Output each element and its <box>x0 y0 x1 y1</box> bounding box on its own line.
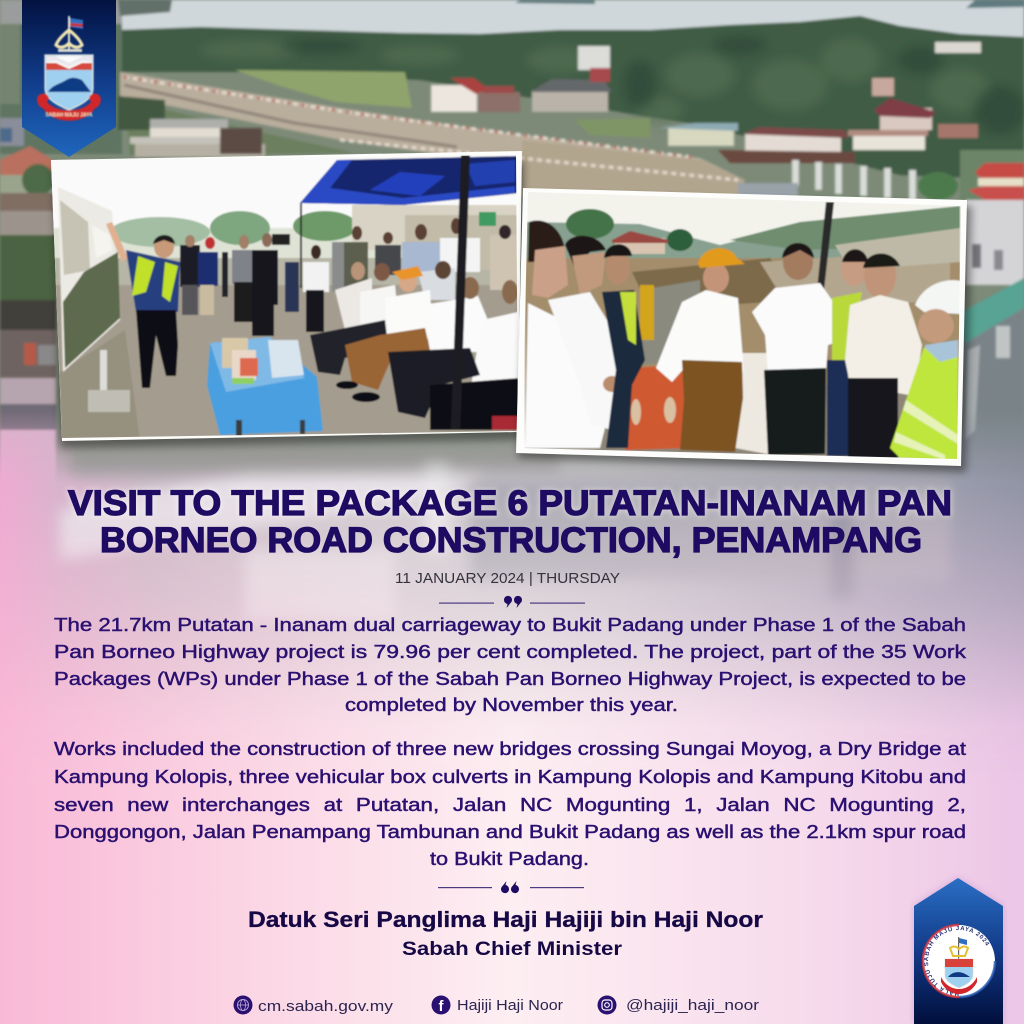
man in white helmet and yellow vest <box>890 280 960 460</box>
man in black hair, far left <box>525 220 605 448</box>
right strip <box>960 150 1024 500</box>
paragraph 2 <box>54 739 966 869</box>
photo: officials at the work site <box>516 185 972 472</box>
standing crowd <box>180 218 520 336</box>
man in safety vest, third <box>602 244 645 448</box>
seated officials <box>310 261 520 430</box>
title: BORNEO ROAD CONSTRUCTION, PENAMPANG <box>100 521 922 560</box>
icon: instagram <box>598 996 616 1014</box>
man with orange cap <box>656 248 745 452</box>
footer: facebook <box>432 996 563 1015</box>
footer: website <box>234 996 394 1015</box>
attribution: name and position: Sabah Chief Minister <box>402 939 623 960</box>
ribbon motto: SABAH MAJU JAYA <box>45 112 93 118</box>
footer: instagram: @hajiji_haji_noor <box>626 997 759 1014</box>
background: faded concrete viaduct band <box>0 415 1024 724</box>
tent pole <box>451 155 470 430</box>
paragraph 2: Works included the construction of three new bridges crossing Sungai Moyog, a Dry Bridge at <box>54 739 966 759</box>
background: pink gradient overlay <box>0 503 1024 1024</box>
table with drinks <box>207 337 323 436</box>
opening quote ornament <box>439 596 585 608</box>
paragraph 2: seven new interchanges at Putatan, Jalan NC Mogunting 1, Jalan NC Mogunting 2, <box>54 795 966 815</box>
icon: globe <box>234 996 252 1014</box>
paragraph 1: The 21.7km Putatan - Inanam dual carriageway to Bukit Padang under Phase 1 of the Sabah <box>54 615 966 635</box>
man in cream shirt <box>845 253 922 458</box>
footer: facebook: Hajiji Haji Noor <box>457 997 563 1014</box>
title: VISIT TO THE PACKAGE 6 PUTATAN-INANAM PAN <box>68 484 952 523</box>
icon: Sabah coat of arms <box>37 16 101 121</box>
forest mass <box>118 16 1024 180</box>
date: 11 JANUARY 2024 | THURSDAY <box>395 571 620 587</box>
speaker <box>106 222 180 388</box>
paragraph 1: Packages (WPs) under Phase 1 of the Sabah Pan Borneo Highway Project, is expected to be <box>54 669 966 689</box>
icon: facebook: f <box>438 998 444 1015</box>
paragraph 2: to Bukit Padang. <box>430 849 589 869</box>
bottom-right logo banner <box>911 877 1006 1024</box>
road <box>120 72 745 192</box>
attribution: name and position <box>248 907 763 960</box>
left strip <box>0 146 56 500</box>
closing quote ornament <box>438 881 584 893</box>
pillars and structures <box>738 160 958 200</box>
board with photos <box>58 187 130 412</box>
buildings <box>0 42 981 163</box>
attribution: name and position: Datuk Seri Panglima Haji Hajiji bin Haji Noor <box>248 907 763 932</box>
background: aerial photo of road construction site <box>0 0 1024 500</box>
icon: Hala Tuju Sabah Maju Jaya emblem: HALA TUJU SABAH MAJU JAYA 2024 <box>924 926 990 996</box>
paragraph 2: Kampung Kolopis, three vehicular box culverts in Kampung Kolopis and Kampung Kitobu and <box>54 767 966 787</box>
paragraph 1 <box>54 615 967 715</box>
white water barrier <box>735 353 772 455</box>
paragraph 2: Donggongon, Jalan Penampang Tambunan and Bukit Padang as well as the 2.1km spur road <box>54 822 966 842</box>
man in vest behind <box>827 249 868 456</box>
title <box>68 484 952 560</box>
title: VISIT TO THE PACKAGE 6 PUTATAN-INANAM PAN <box>68 484 952 523</box>
footer: instagram <box>598 996 759 1014</box>
man in white shirt, second <box>548 236 622 430</box>
paragraph 1: completed by November this year. <box>345 695 678 715</box>
paragraph 1: Pan Borneo Highway project is 79.96 per cent completed. The project, part of the 35 Work <box>54 642 967 662</box>
man in white shirt with black trousers <box>751 242 834 455</box>
footer: website: cm.sabah.gov.my <box>258 998 394 1015</box>
orange water barrier <box>625 365 690 450</box>
top-left crest banner <box>22 0 116 157</box>
photo: briefing under blue tent <box>50 150 530 448</box>
